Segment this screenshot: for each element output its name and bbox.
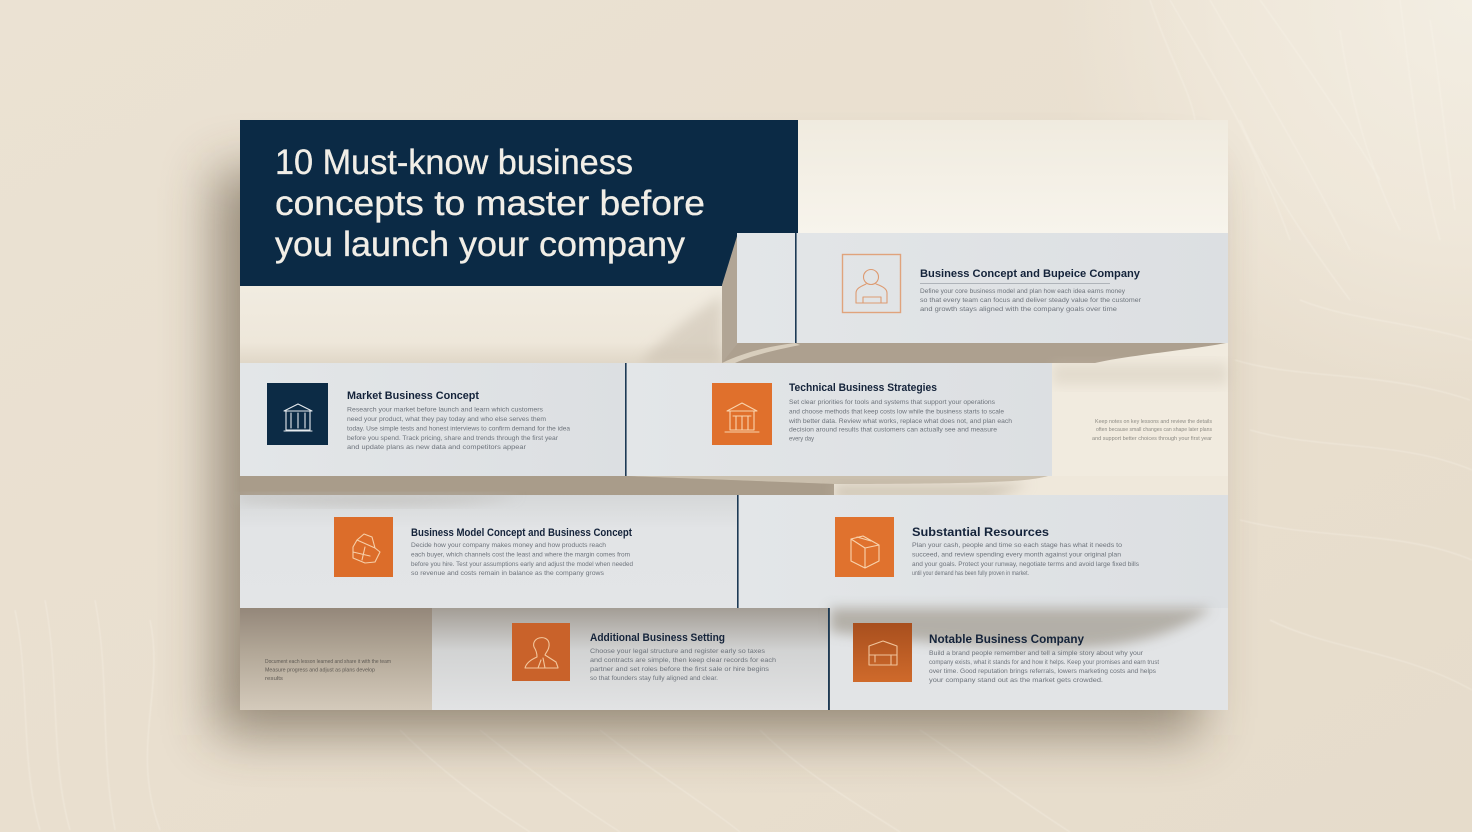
icon: person <box>842 254 900 312</box>
card: substantial resources <box>737 495 1228 608</box>
panel drop shadow <box>215 170 1200 735</box>
card body text: and update plans as new data and competitors appear <box>347 444 527 451</box>
icon: person bust <box>512 623 570 681</box>
card body text <box>347 406 570 451</box>
card body text <box>929 650 1159 684</box>
card body text: each buyer, which channels cost the least and where the margin comes from <box>411 552 630 558</box>
panel: title block <box>240 120 798 286</box>
card: market business concept <box>240 363 626 476</box>
panel: lower left note <box>240 608 432 710</box>
card body text: Choose your legal structure and register early so taxes <box>590 648 766 655</box>
card: business concept and company <box>737 233 1228 343</box>
card body text: before you spend. Track pricing, share and trends through the first year <box>347 435 559 442</box>
card body text: decision around results that customers can actually see and measure <box>789 426 997 434</box>
card heading: Market Business Concept <box>347 390 479 402</box>
side note text: Keep notes on key lessons and review the details <box>1095 419 1212 425</box>
card body text: succeed, and review spending every month against your original plan <box>912 552 1121 558</box>
icon: box <box>835 517 894 577</box>
card body text: Decide how your company makes money and how products reach <box>411 542 606 549</box>
side note text <box>265 659 391 682</box>
card body text <box>920 288 1142 313</box>
card: notable business company <box>828 608 1228 710</box>
icon: building on navy <box>267 383 328 445</box>
card: technical business strategies <box>625 363 1052 476</box>
card body text: before you hire. Test your assumptions early and adjust the model when needed <box>411 561 633 568</box>
side note text: Measure progress and adjust as plans develop <box>265 667 375 673</box>
card body text: partner and set roles before the first sale or hire begins <box>590 666 770 673</box>
card heading: Substantial Resources <box>912 525 1049 539</box>
card body text: Plan your cash, people and time so each stage has what it needs to <box>912 542 1122 549</box>
card: additional business setting <box>432 608 829 710</box>
card heading: Business Concept and Bupeice Company <box>920 268 1141 280</box>
card body text: so that every team can focus and deliver steady value for the customer <box>920 297 1142 304</box>
card heading: Notable Business Company <box>929 632 1084 646</box>
card body text: Set clear priorities for tools and systems that support your operations <box>789 399 996 406</box>
title <box>275 143 705 264</box>
card body text: and choose methods that keep costs low while the business starts to scale <box>789 408 1004 416</box>
card body text: Define your core business model and plan how each idea earns money <box>920 288 1126 295</box>
icon: temple on orange <box>712 383 772 445</box>
icon: house <box>853 623 912 682</box>
card body text: your company stand out as the market gets crowded. <box>929 677 1103 684</box>
title: you launch your company <box>275 225 686 264</box>
card heading: Additional Business Setting <box>590 632 725 644</box>
panel: cream backing <box>240 120 1228 496</box>
side note text: Document each lesson learned and share it with the team <box>265 659 391 665</box>
card body text: over time. Good reputation brings referrals, lowers marketing costs and helps <box>929 668 1157 675</box>
card body text: so that founders stay fully aligned and clear. <box>590 675 718 682</box>
card body text <box>411 542 633 577</box>
side note text: results <box>265 676 283 682</box>
title: 10 Must-know business <box>275 143 633 182</box>
card body text: Research your market before launch and learn which customers <box>347 406 544 414</box>
card body text: and contracts are simple, then keep clear records for each <box>590 657 776 664</box>
card body text: and growth stays aligned with the company goals over time <box>920 306 1117 313</box>
card body text: with better data. Review what works, replace what does not, and plan each <box>788 418 1012 425</box>
card body text <box>912 542 1140 577</box>
card body text: company exists, what it stands for and how it helps. Keep your promises and earn trust <box>929 659 1159 666</box>
card heading: Business Model Concept and Business Concept <box>411 527 632 539</box>
card heading: Technical Business Strategies <box>789 382 937 394</box>
card body text: Build a brand people remember and tell a simple story about why your <box>929 650 1144 657</box>
card body text: need your product, what they pay today and who else serves them <box>347 416 547 423</box>
card body text: until your demand has been fully proven in market. <box>912 570 1029 577</box>
card body text: so revenue and costs remain in balance as the company grows <box>411 570 605 577</box>
card body text: today. Use simple tests and honest interviews to confirm demand for the idea <box>347 426 570 432</box>
side note text <box>1092 419 1212 442</box>
card: business model concept <box>240 495 738 608</box>
card body text <box>788 399 1012 442</box>
side note text: and support better choices through your first year <box>1092 436 1212 442</box>
side note text: often because small changes can shape later plans <box>1096 427 1212 433</box>
card body text <box>590 648 776 682</box>
card body text: and your goals. Protect your runway, negotiate terms and avoid large fixed bills <box>912 561 1140 568</box>
fold shadows between cards <box>240 233 1228 500</box>
icon: blocks <box>334 517 393 577</box>
card body text: every day <box>789 436 815 442</box>
title: concepts to master before <box>275 184 705 223</box>
